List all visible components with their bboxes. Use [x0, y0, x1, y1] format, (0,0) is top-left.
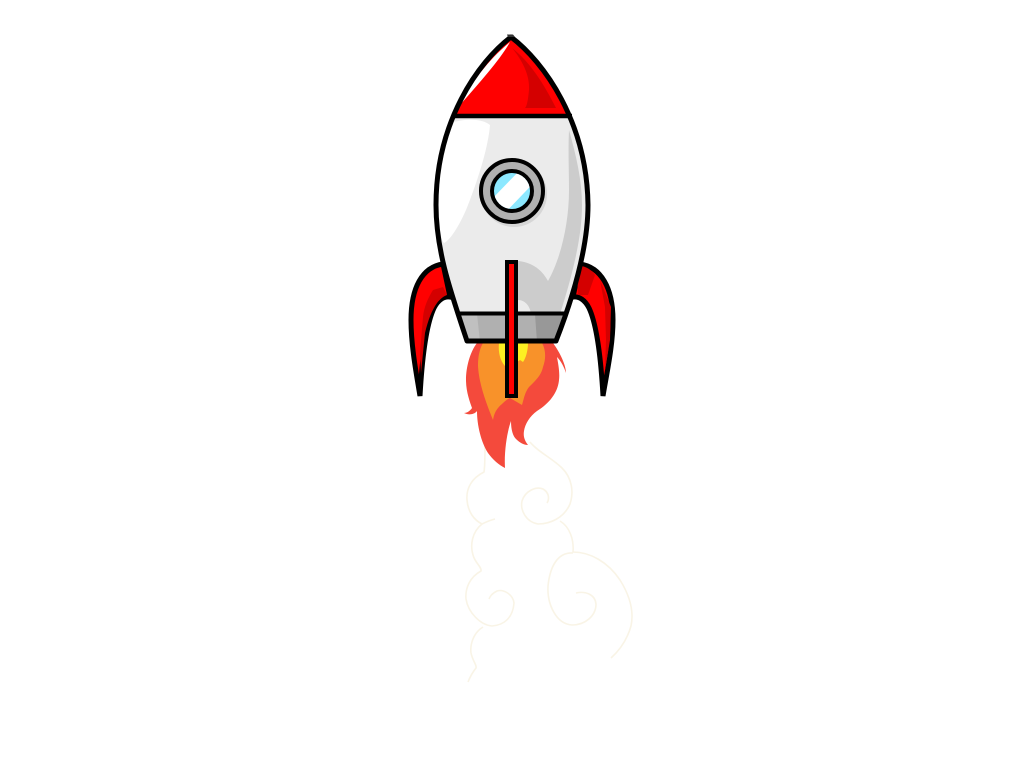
band divider	[457, 312, 566, 316]
body shadow	[518, 130, 582, 314]
porthole	[481, 160, 547, 227]
right fin shading	[577, 266, 595, 295]
nose highlight	[460, 42, 510, 105]
center fin	[507, 262, 516, 396]
rocket body	[436, 34, 588, 342]
nose tip cap	[507, 34, 515, 37]
porthole shadow	[481, 161, 547, 227]
nose divider	[453, 114, 572, 118]
left fin	[411, 264, 450, 396]
engine band	[477, 316, 537, 338]
left fin shading	[420, 287, 447, 373]
right fin	[573, 264, 613, 396]
body highlight	[438, 120, 490, 243]
glass glare	[494, 174, 530, 209]
outer red flame	[464, 343, 566, 468]
flame	[464, 343, 566, 468]
orange flame	[478, 343, 545, 420]
nose cone	[455, 37, 570, 116]
nose shadow	[512, 48, 556, 108]
smoke trail	[466, 442, 632, 682]
small shadow highlight	[518, 300, 530, 312]
yellow flame	[499, 343, 528, 368]
body outline	[436, 37, 588, 341]
